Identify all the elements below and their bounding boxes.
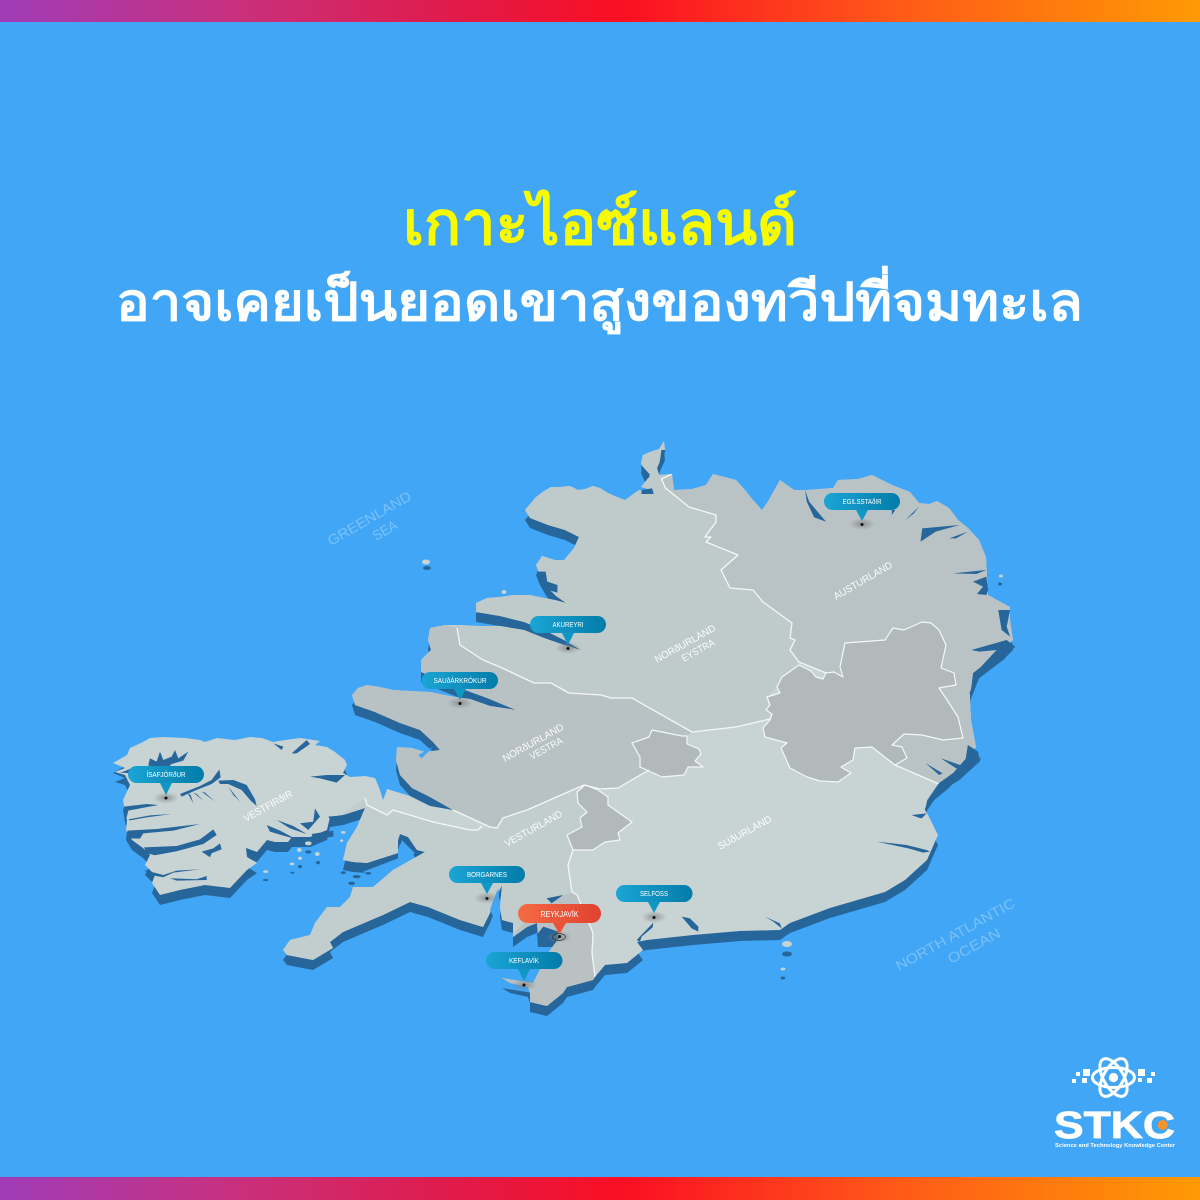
top gradient bar (0, 0, 1200, 22)
pin: Sauðárkrókur: SAUðÁRKRÓKUR (434, 676, 487, 685)
pin: Reykjavík (518, 904, 601, 943)
pin: Keflavík (486, 952, 562, 991)
region: Austurland (662, 474, 1013, 784)
fjords: Vestfirðir (120, 740, 365, 881)
region label: Vestfirðir: VESTFIRðIR (242, 788, 295, 825)
region label: Norðurland Eystra: NORðURLAND (653, 622, 718, 666)
region label: Norðurland Eystra: EYSTRA (680, 637, 717, 665)
fjords: north and east (536, 450, 1015, 818)
region boundaries (365, 474, 939, 977)
region: Norðurland Vestra (352, 625, 691, 828)
pin: Akureyri: AKUREYRI (552, 620, 584, 629)
logo: STKC (1054, 1054, 1176, 1149)
land base (113, 441, 1013, 1006)
pin: Ísafjörður (128, 766, 204, 804)
pin: Borgarnes: BORGARNES (467, 870, 507, 879)
fjords (120, 450, 1015, 943)
fjords: south (637, 780, 957, 942)
pin: Ísafjörður: ÍSAFJÖRðUR (146, 770, 186, 779)
coastal shadow (113, 451, 1013, 1016)
logo wordmark: STKC (1054, 1105, 1175, 1147)
region label: Norðurland Vestra: VESTRA (528, 735, 565, 763)
sea label: North Atlantic Ocean: OCEAN (945, 925, 1003, 967)
title: เกาะไอซ์แลนด์ (403, 188, 797, 257)
pin: Borgarnes (449, 866, 525, 904)
sea label: Greenland Sea: GREENLAND (324, 488, 414, 549)
region: Vatnajökull patch (763, 622, 963, 782)
subtitle: อาจเคยเป็นยอดเขาสูงของทวีปที่จมทะเล (116, 266, 1083, 335)
region: Reykjanes (502, 892, 595, 1006)
bottom gradient bar (0, 1177, 1200, 1200)
logo dot (1158, 1120, 1168, 1130)
pin: Egilsstaðir: EGILSSTAðIR (842, 497, 882, 506)
region label: Suðurland: SUðURLAND (716, 813, 774, 853)
region label: Norðurland Vestra: NORðURLAND (501, 721, 566, 765)
region: Hofsjökull patch (632, 730, 703, 777)
pin: Selfoss (616, 885, 692, 923)
region: Vesturland (283, 808, 520, 960)
logo tagline: Science and Technology Knowledge Center (1055, 1143, 1176, 1149)
region: Norðurland Eystra (452, 441, 798, 731)
region label: Austurland: AUSTURLAND (832, 560, 895, 603)
archipelago and shallow water (341, 747, 500, 917)
pin: Reykjavík: REYKJAVÍK (540, 910, 579, 919)
fjords: Reykjavík area (537, 895, 563, 943)
sea label: North Atlantic Ocean: NORTH ATLANTIC (893, 895, 1018, 974)
regions (283, 441, 1013, 1006)
pin: Egilsstaðir (824, 493, 900, 530)
pin: Keflavík: KEFLAVÍK (509, 956, 539, 965)
pin: Selfoss: SELFOSS (640, 889, 668, 898)
map of Iceland (113, 441, 1015, 1016)
region: Langjökull patch (567, 785, 632, 850)
pin: Akureyri (530, 616, 606, 654)
offshore islands (263, 560, 1003, 980)
sea label: Greenland Sea: SEA (370, 516, 401, 544)
pin: Sauðárkrókur (422, 672, 498, 709)
region label: Vesturland: VESTURLAND (503, 809, 564, 850)
logo icon: atom (1072, 1054, 1155, 1101)
